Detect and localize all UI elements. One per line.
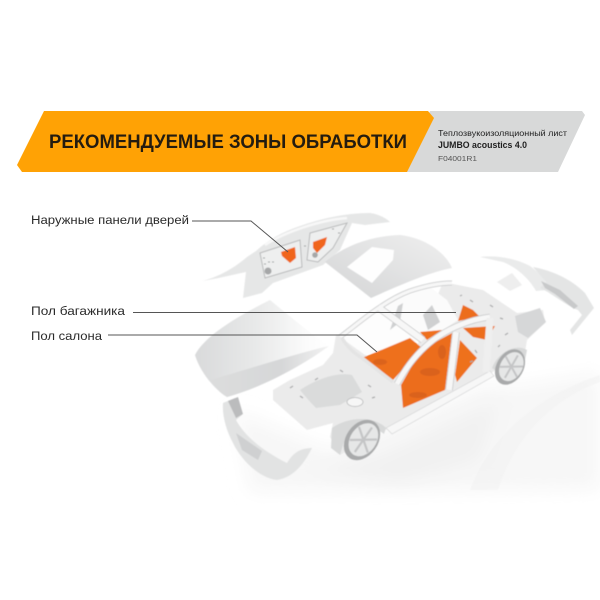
B pillar: [449, 332, 456, 390]
far side pillars: [390, 303, 440, 330]
hood: [195, 300, 330, 397]
label outer door panels: Наружные панели дверей: [31, 213, 189, 227]
product name line 1: Теплозвукоизоляционный лист: [438, 128, 567, 138]
windshield and side window openings: [340, 287, 458, 355]
door right orange zone: [313, 237, 327, 253]
callout: cabin floor: [31, 329, 377, 352]
door left orange zone: [281, 247, 296, 263]
roof rail: [265, 218, 347, 245]
bumper intake: [228, 397, 243, 418]
door detail specks: [263, 229, 340, 264]
floor shadows: [235, 372, 600, 492]
parcel shelf panel: [497, 273, 522, 291]
banner orange ribbon: [17, 111, 434, 172]
floor dark texture: [373, 345, 446, 398]
callout: outer door panels: [31, 213, 288, 252]
far rail: [340, 283, 452, 337]
door speakers: [264, 252, 318, 274]
article code: F04001R1: [438, 154, 477, 163]
side rail: [397, 317, 490, 384]
windshield lower rail: [342, 338, 393, 382]
cabin floor orange rear: [455, 340, 477, 382]
product name line 2: JUMBO acoustics 4.0: [438, 140, 527, 150]
cross beam: [378, 307, 423, 340]
sunroof opening: [347, 247, 394, 283]
trunk floor orange lower: [463, 326, 495, 340]
engine and rear detail specks: [290, 295, 508, 398]
cabin floor orange front: [362, 338, 422, 380]
label trunk floor: Пол багажника: [31, 304, 125, 318]
trunk floor orange upper: [458, 305, 480, 321]
body pillars and roof rails: [340, 283, 490, 390]
door side frame: [202, 213, 390, 298]
leader line cabin floor: [108, 335, 377, 352]
exploded car illustration: [195, 213, 600, 492]
rear quarter: [486, 318, 490, 372]
banner: [17, 111, 585, 172]
reflection on right: [470, 375, 600, 490]
engine bay cavity: [300, 374, 362, 408]
front bumper: [223, 397, 312, 480]
leader line outer door panels: [192, 221, 288, 252]
door left: [260, 240, 302, 278]
banner grey tag: [404, 111, 585, 172]
rear wheel: [489, 344, 531, 390]
roof panel: [325, 235, 452, 298]
trunk lid: [480, 256, 548, 291]
car body shell: [273, 282, 546, 455]
label cabin floor: Пол салона: [31, 329, 102, 343]
grille: [236, 433, 262, 460]
cabin floor orange rear small: [420, 330, 442, 340]
leader line trunk floor: [133, 312, 456, 314]
heading: РЕКОМЕНДУЕМЫЕ ЗОНЫ ОБРАБОТКИ: [49, 131, 407, 153]
pillar outlines: [340, 283, 490, 390]
body sill: [386, 371, 494, 434]
door right: [307, 223, 347, 262]
cabin floor orange middle: [401, 333, 452, 408]
rear trim shading: [515, 308, 546, 338]
front wheel: [336, 413, 388, 467]
strut tower: [347, 398, 363, 406]
rear wheel arch: [492, 348, 527, 372]
front wheel arch: [331, 419, 386, 455]
rear bumper dark inner: [541, 281, 578, 309]
rear bumper: [533, 267, 594, 335]
